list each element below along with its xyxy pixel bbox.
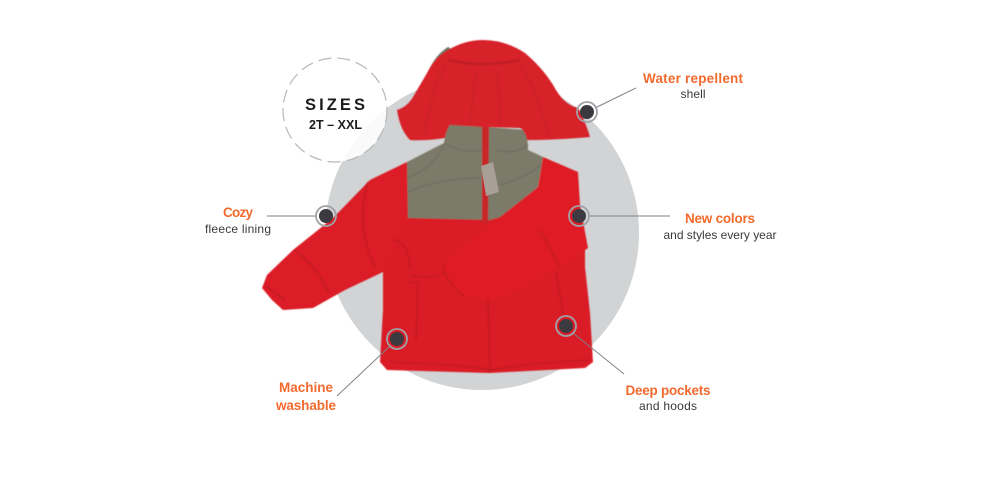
callout: cozy xyxy=(205,205,336,236)
jacket creases xyxy=(265,60,590,372)
hood xyxy=(397,40,590,140)
callout: deep pockets xyxy=(556,316,710,413)
callout: deep pockets: and hoods xyxy=(639,399,697,413)
background circle xyxy=(325,76,639,390)
hang tag xyxy=(481,162,499,196)
callout: machine washable: Machine xyxy=(279,380,333,395)
callout: water repellent xyxy=(577,71,744,122)
zipper xyxy=(482,126,489,224)
callout: new colors: and styles every year xyxy=(664,228,776,242)
hood back edge xyxy=(428,47,470,92)
callout: water repellent: shell xyxy=(680,87,706,101)
callout: new colors xyxy=(569,206,776,242)
callout: new colors: New colors xyxy=(685,211,755,226)
callout: cozy: fleece lining xyxy=(205,222,271,236)
right sleeve xyxy=(440,157,588,298)
sizes badge: 2T – XXL xyxy=(309,118,362,132)
callout: water repellent: Water repellent xyxy=(643,71,744,86)
left sleeve xyxy=(262,162,412,310)
jacket xyxy=(262,40,593,373)
callout: cozy: Cozy xyxy=(223,205,253,220)
jacket body xyxy=(380,200,593,373)
sizes badge xyxy=(283,58,387,162)
yoke xyxy=(406,124,543,226)
callout: machine washable xyxy=(275,329,407,413)
sizes badge: SIZES xyxy=(305,96,365,114)
callout: machine washable: washable xyxy=(275,398,336,413)
callout: deep pockets: Deep pockets xyxy=(626,383,710,398)
